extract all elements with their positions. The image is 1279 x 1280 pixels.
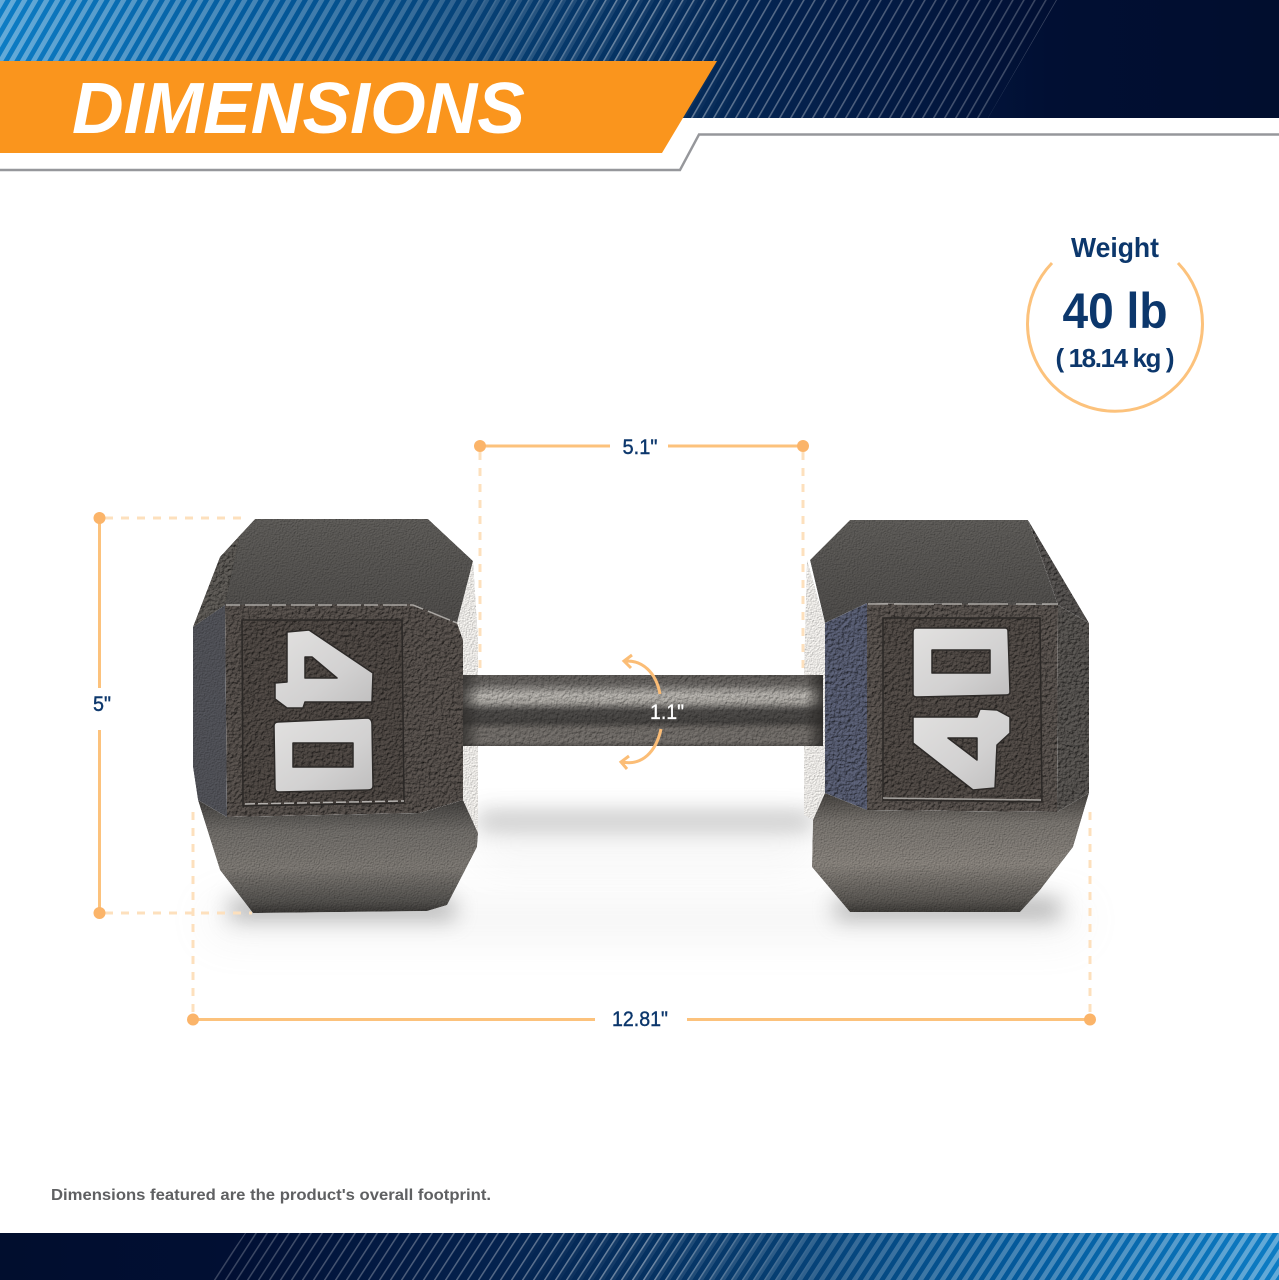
head height value: 5" — [93, 693, 111, 716]
right head light side — [804, 560, 825, 820]
right head textured top corner — [1028, 520, 1089, 623]
diameter arrow top — [624, 655, 660, 694]
left head highlight edge — [226, 605, 457, 623]
right head blue side — [825, 603, 867, 810]
right head recessed frame — [883, 618, 1042, 802]
weight value pounds: 40 lb — [1062, 283, 1168, 339]
diameter arrow bottom — [621, 729, 661, 769]
weight label: Weight — [1071, 232, 1159, 263]
left hex head — [193, 519, 478, 913]
footnote: Dimensions featured are the product's overall footprint. — [51, 1187, 491, 1204]
header white ribbon with grey outline — [0, 118, 1279, 170]
title banner — [0, 61, 717, 153]
left head front face — [225, 604, 463, 817]
right head embossed number 4 — [913, 709, 1010, 790]
head height line — [98, 518, 101, 913]
dashed guide lines — [105, 452, 1090, 1013]
left head textured corner — [193, 519, 255, 627]
left head dark side — [193, 605, 227, 817]
dimension: head height — [93, 512, 111, 919]
dimension: handle length — [474, 436, 809, 459]
handle — [463, 675, 823, 746]
right head front face — [867, 603, 1058, 812]
right head bottom face — [812, 793, 1089, 912]
overall length line — [193, 1018, 1090, 1021]
left head embossed number 0 — [274, 718, 373, 792]
weight ring — [1027, 263, 1202, 411]
diameter value: 1.1" — [650, 701, 684, 724]
right head top face — [810, 520, 1058, 623]
handle length value: 5.1" — [622, 436, 658, 459]
header banner — [0, 0, 1279, 118]
right head outer side — [1057, 605, 1089, 812]
handle length line — [480, 444, 803, 448]
weight value kilograms: ( 18.14 kg ) — [1056, 343, 1174, 373]
ground shadows — [210, 812, 1080, 935]
left head bottom face — [198, 800, 478, 913]
title: DIMENSIONS — [72, 69, 525, 149]
left head top face — [193, 519, 473, 627]
dimension: handle diameter — [621, 655, 684, 769]
footer banner — [0, 1233, 1279, 1280]
weight badge — [1027, 232, 1202, 411]
dumbbell — [193, 519, 1089, 913]
right hex head — [804, 520, 1089, 912]
dimension: overall length — [187, 1008, 1096, 1031]
overall length value: 12.81" — [612, 1008, 668, 1031]
left head recessed frame — [242, 620, 404, 806]
right head embossed number 0 — [913, 628, 1010, 697]
left head embossed number 4 — [275, 630, 373, 708]
right head highlight edge — [868, 603, 1058, 605]
left head light side — [457, 560, 478, 847]
